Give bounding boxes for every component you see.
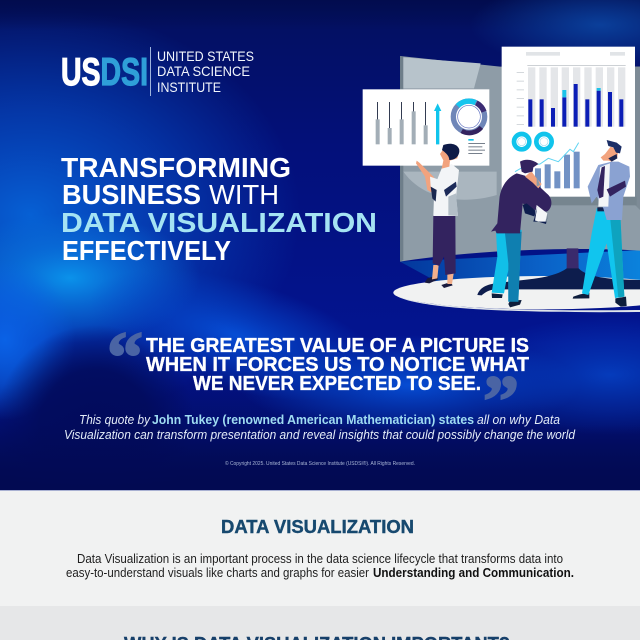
attribution text: This quote by — [79, 412, 151, 427]
person: man with tablet — [491, 160, 551, 307]
logo — [61, 47, 254, 96]
description: Data Visualization is an important process in the data science lifecycle that transforms data into — [77, 552, 563, 566]
glow under screen — [400, 250, 640, 283]
axis ticks — [517, 72, 524, 125]
logo wordmark — [157, 48, 254, 95]
attribution text — [64, 412, 576, 442]
ring gauges — [514, 134, 552, 149]
opening quote mark: “ — [107, 317, 143, 397]
thin lines — [377, 102, 426, 129]
person: woman pointing — [416, 144, 459, 288]
quote text: WE NEVER EXPECTED TO SEE. — [193, 373, 481, 395]
title: DATA VISUALIZATION — [61, 207, 377, 238]
title — [61, 152, 377, 266]
bar tracks — [528, 67, 625, 127]
quote text: WHEN IT FORCES US TO NOTICE WHAT — [146, 354, 529, 376]
quote — [107, 317, 529, 441]
title: BUSINESS — [62, 179, 201, 210]
heading: DATA VISUALIZATION — [221, 517, 414, 537]
title: TRANSFORMING — [61, 152, 291, 183]
panel: why is data visualization important — [0, 606, 640, 640]
title: WITH — [209, 179, 279, 210]
grey bars — [376, 111, 428, 144]
chart card: left — [363, 89, 489, 166]
trend line — [515, 143, 579, 172]
cyan arrow — [434, 103, 441, 144]
quote text — [146, 335, 529, 395]
small bar chart — [535, 152, 580, 188]
attribution text: John Tukey (renowned American Mathematician) states — [152, 412, 474, 427]
attribution text: all on why Data — [477, 412, 560, 427]
title: EFFECTIVELY — [62, 235, 231, 266]
illustration: team reviewing dashboards — [363, 47, 640, 312]
logo wordmark: DATA SCIENCE — [157, 63, 250, 79]
logo divider — [150, 47, 151, 96]
copyright: © Copyright 2025. United States Data Science Institute (USDSI®). All Rights Reserved. — [225, 460, 415, 467]
logo mark: USDSI: USDSI — [61, 51, 148, 94]
panel: data visualization — [0, 490, 640, 606]
logo wordmark: UNITED STATES — [157, 48, 254, 64]
logo wordmark: INSTITUTE — [157, 79, 221, 95]
closing quote mark: ” — [483, 361, 519, 441]
chart card: right — [502, 47, 637, 205]
description — [66, 552, 574, 580]
display floor platform — [393, 276, 640, 309]
description: easy-to-understand visuals like charts and graphs for easier — [66, 566, 369, 580]
monitor stand — [567, 248, 579, 270]
legend — [468, 139, 474, 141]
attribution text: Visualization can transform presentation and reveal insights that could possibly change the world — [64, 427, 576, 442]
donut chart — [453, 101, 485, 133]
bar values — [528, 84, 623, 127]
person: man thinking — [573, 140, 630, 307]
monitor base — [477, 268, 640, 295]
monitor screen — [400, 56, 640, 262]
quote text: THE GREATEST VALUE OF A PICTURE IS — [146, 335, 529, 357]
description: Understanding and Communication. — [373, 566, 574, 580]
